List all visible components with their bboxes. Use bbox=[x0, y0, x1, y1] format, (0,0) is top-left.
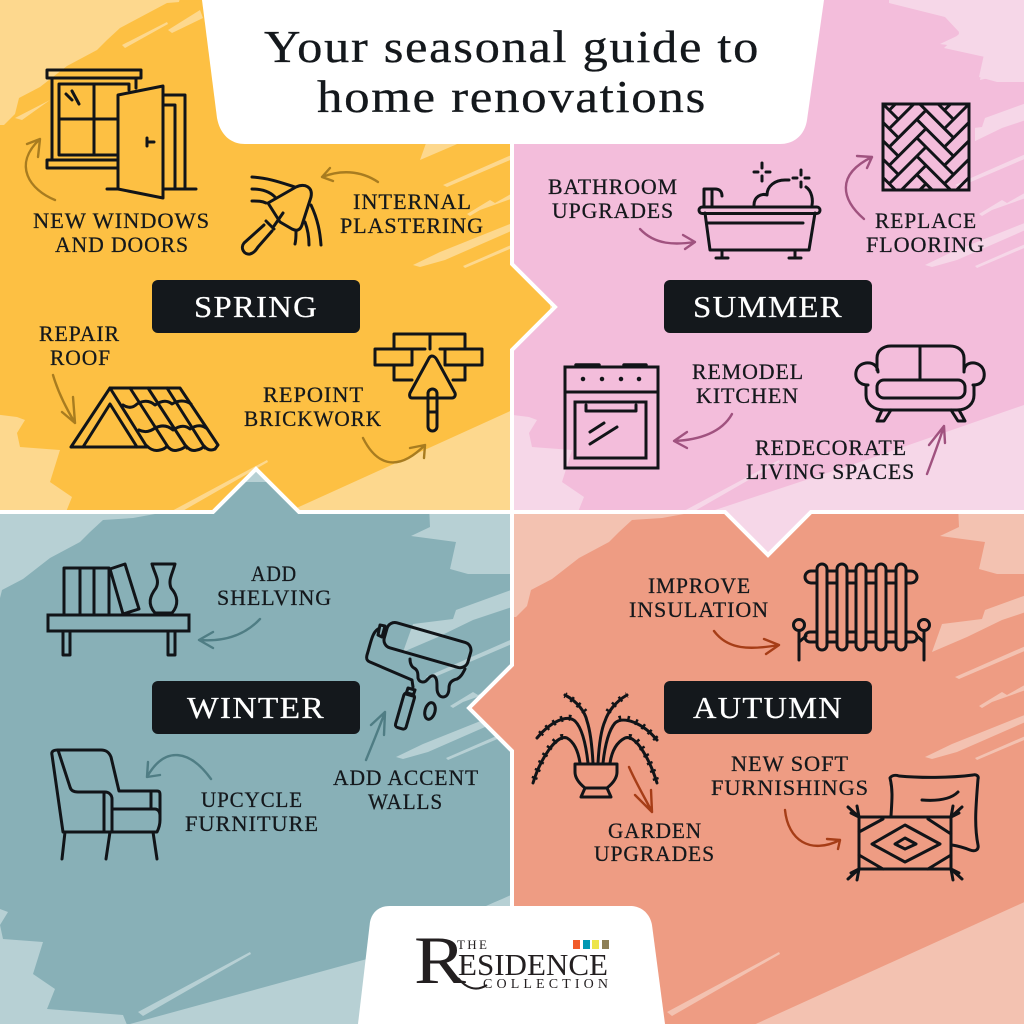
arrow: upcycle bbox=[147, 755, 211, 779]
heading: winter bbox=[152, 681, 360, 734]
title: Your seasonal guide to bbox=[264, 21, 760, 72]
icon: radiator bbox=[794, 564, 930, 660]
heading: summer: SUMMER bbox=[693, 289, 843, 324]
autumn paint background bbox=[465, 482, 1024, 1024]
arrow: roof bbox=[53, 375, 75, 423]
label: internal plastering bbox=[340, 189, 484, 238]
label: add shelving: ADD bbox=[251, 561, 297, 586]
icon: plastering trowel bbox=[242, 177, 321, 254]
label: repoint brickwork: BRICKWORK bbox=[244, 406, 382, 431]
label: new soft furnishings: NEW SOFT bbox=[731, 751, 849, 776]
icon: window and door bbox=[47, 70, 196, 198]
label: upcycle furniture: UPCYCLE bbox=[201, 787, 303, 812]
label: garden upgrades: UPGRADES bbox=[594, 841, 715, 866]
arrow: plastering bbox=[322, 168, 378, 182]
panel: summer bbox=[472, 0, 1024, 560]
title panel bbox=[202, 0, 824, 144]
icon: oven bbox=[565, 365, 658, 468]
label: add accent walls: ADD ACCENT bbox=[333, 765, 479, 790]
label: internal plastering: INTERNAL bbox=[353, 189, 472, 214]
title bbox=[264, 21, 760, 122]
label: remodel kitchen: KITCHEN bbox=[696, 383, 799, 408]
summer paint background bbox=[472, 0, 1024, 560]
label: redecorate living spaces: REDECORATE bbox=[755, 435, 907, 460]
icon: bricks and trowel bbox=[375, 334, 482, 431]
label: internal plastering: PLASTERING bbox=[340, 213, 484, 238]
label: remodel kitchen bbox=[692, 359, 804, 408]
spring paint background bbox=[0, 0, 552, 510]
heading: spring: SPRING bbox=[194, 289, 318, 324]
arrow: insulation bbox=[714, 631, 779, 654]
label: replace flooring: FLOORING bbox=[866, 232, 985, 257]
label: improve insulation: INSULATION bbox=[629, 597, 769, 622]
label: redecorate living spaces: LIVING SPACES bbox=[746, 459, 915, 484]
arrow: flooring bbox=[846, 156, 872, 219]
winter paint background bbox=[0, 465, 533, 1024]
icon: herringbone floor bbox=[883, 104, 969, 190]
logo: The Residence Collection: COLLECTION bbox=[483, 977, 608, 992]
logo: The Residence Collection: THE bbox=[457, 937, 487, 952]
arrow: brickwork bbox=[363, 438, 425, 462]
icon: sofa bbox=[856, 346, 984, 421]
label: add accent walls: WALLS bbox=[368, 789, 443, 814]
label: repair roof: REPAIR bbox=[39, 321, 120, 346]
arrow: kitchen bbox=[674, 414, 732, 448]
label: repair roof: ROOF bbox=[50, 345, 111, 370]
label: remodel kitchen: REMODEL bbox=[692, 359, 804, 384]
arrow: shelving bbox=[199, 619, 260, 648]
panel: autumn bbox=[465, 482, 1024, 1024]
label: upcycle furniture bbox=[185, 787, 319, 836]
label: improve insulation: IMPROVE bbox=[648, 573, 751, 598]
icon: shelf with books and vase bbox=[48, 564, 189, 655]
label: add shelving: SHELVING bbox=[217, 585, 332, 610]
icon: cushions bbox=[848, 775, 978, 880]
label: new windows and doors: AND DOORS bbox=[55, 232, 189, 257]
heading: summer bbox=[664, 280, 872, 333]
logo: The Residence Collection: ESIDENCE bbox=[458, 947, 608, 982]
heading: autumn bbox=[664, 681, 872, 734]
label: upcycle furniture: FURNITURE bbox=[185, 811, 319, 836]
label: garden upgrades bbox=[594, 818, 715, 866]
label: bathroom upgrades: BATHROOM bbox=[548, 174, 678, 199]
label: repoint brickwork: REPOINT bbox=[263, 382, 364, 407]
heading: spring bbox=[152, 280, 360, 333]
heading: winter: WINTER bbox=[187, 690, 325, 725]
logo panel bbox=[358, 906, 665, 1024]
icon: bathtub bbox=[699, 163, 820, 258]
arrow: garden bbox=[629, 767, 652, 812]
label: bathroom upgrades bbox=[548, 174, 678, 223]
label: new soft furnishings: FURNISHINGS bbox=[711, 775, 869, 800]
label: redecorate living spaces bbox=[746, 435, 915, 484]
label: new soft furnishings bbox=[711, 751, 869, 800]
label: bathroom upgrades: UPGRADES bbox=[552, 198, 674, 223]
title: home renovations bbox=[317, 71, 707, 122]
arrow: living spaces bbox=[927, 426, 945, 474]
label: new windows and doors: NEW WINDOWS bbox=[33, 208, 210, 233]
label: replace flooring: REPLACE bbox=[875, 208, 977, 233]
label: repoint brickwork bbox=[244, 382, 382, 431]
label: add shelving bbox=[217, 561, 332, 610]
heading: autumn: AUTUMN bbox=[693, 690, 843, 725]
panel: spring bbox=[0, 0, 552, 510]
icon: paint roller bbox=[367, 621, 473, 730]
logo: The Residence Collection bbox=[414, 922, 609, 998]
panel: winter bbox=[0, 465, 533, 1024]
label: improve insulation bbox=[629, 573, 769, 622]
label: replace flooring bbox=[866, 208, 985, 257]
arrow: accent walls bbox=[366, 712, 385, 760]
icon: potted plant bbox=[533, 695, 657, 797]
arrow: windows bbox=[26, 139, 55, 200]
icon: roof bbox=[71, 388, 218, 450]
label: add accent walls bbox=[333, 765, 479, 814]
logo: The Residence Collection: R bbox=[414, 922, 467, 998]
arrow: bathroom bbox=[640, 229, 695, 249]
label: repair roof bbox=[39, 321, 120, 370]
label: new windows and doors bbox=[33, 208, 210, 257]
arrow: furnishings bbox=[785, 810, 840, 849]
label: garden upgrades: GARDEN bbox=[608, 818, 702, 843]
icon: armchair bbox=[52, 750, 160, 859]
